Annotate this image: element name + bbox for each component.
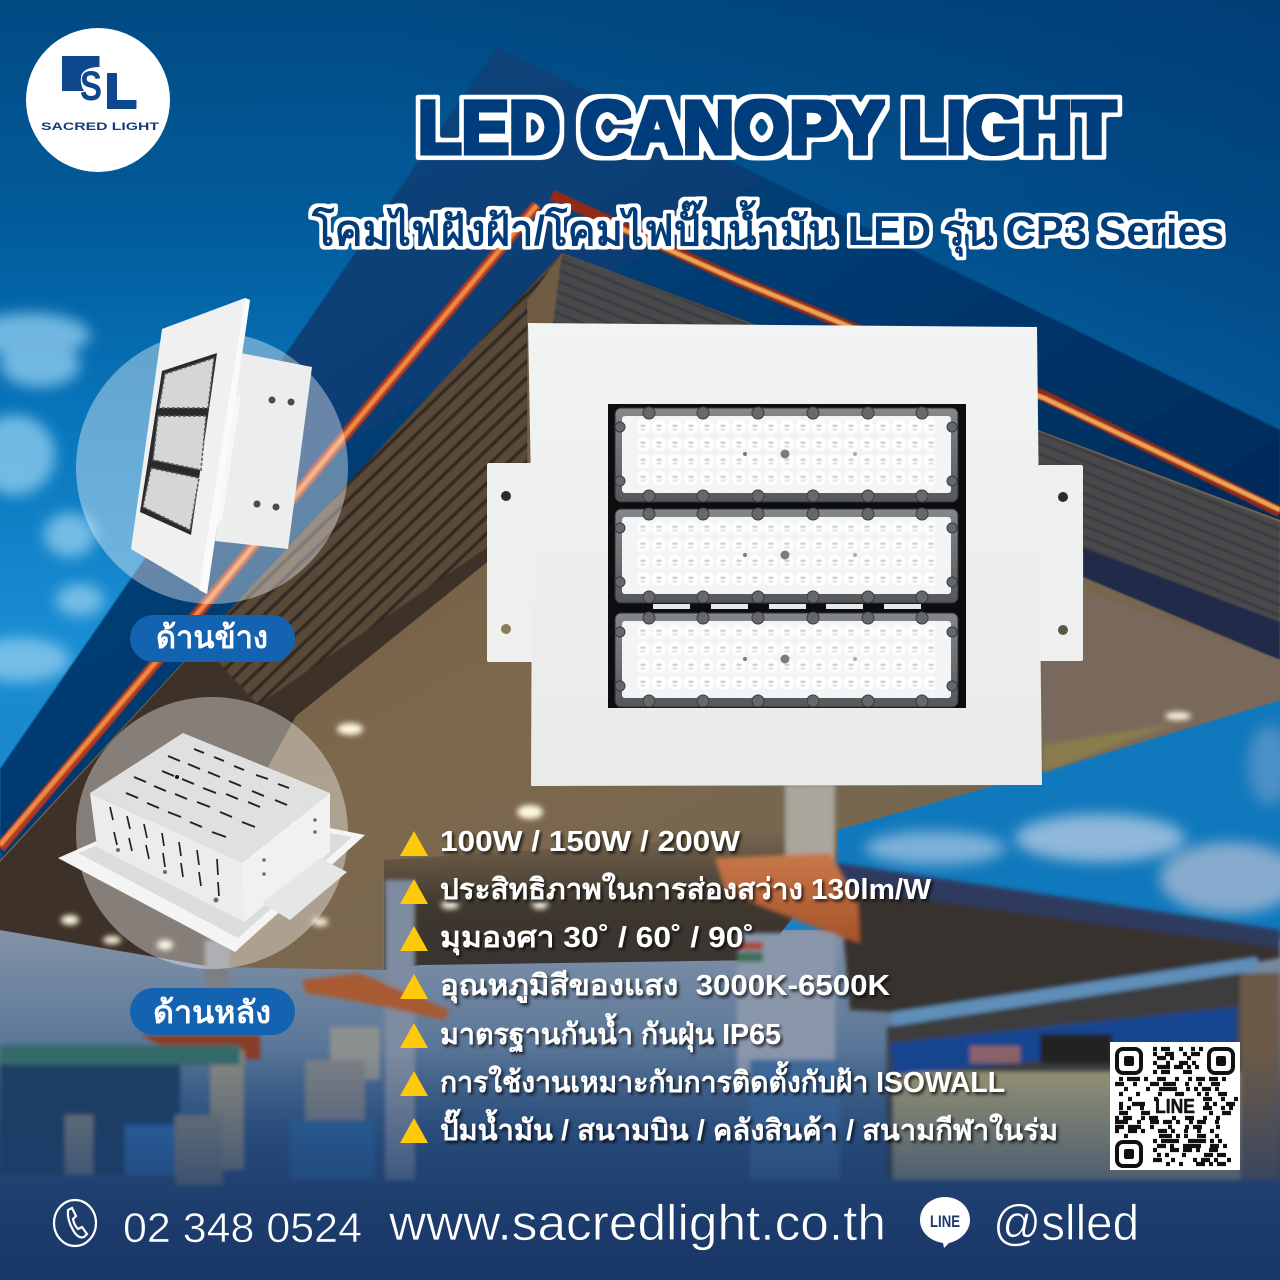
product: main front view xyxy=(487,323,1083,786)
vent slots top xyxy=(126,749,289,837)
ceiling lights xyxy=(61,712,1191,950)
feature: applications: ปั๊มน้ำมัน / สนามบิน / คลังสินค้า / สนามกีฬาในร่ม xyxy=(440,1108,1058,1147)
orange strips xyxy=(0,195,1280,848)
icon: LINE xyxy=(920,1197,970,1248)
right navy band xyxy=(1083,548,1280,660)
label: side view xyxy=(130,615,295,662)
feature: colour temperature: อุณหภูมิสีของแสง 3000K-6500K xyxy=(440,970,890,1003)
station structures xyxy=(0,785,1280,1185)
footer contact bar xyxy=(54,1195,1139,1251)
canopy underside xyxy=(0,253,1280,970)
left brown band xyxy=(0,253,562,967)
left mounting tab xyxy=(487,463,535,662)
LED modules xyxy=(615,407,958,707)
left bracket xyxy=(302,973,449,1020)
QR code: LINE xyxy=(1155,1096,1195,1118)
panel: side view circle xyxy=(76,298,348,604)
feature: installation: การใช้งานเหมาะกับการติดตั้งกับฝ้า ISOWALL xyxy=(440,1060,1005,1099)
icon: phone xyxy=(54,1200,96,1246)
clouds left xyxy=(0,313,104,682)
right mauve tan xyxy=(1043,577,1280,772)
central pillar xyxy=(785,785,835,875)
feature: waterproof: มาตรฐานกันน้ำ กันฝุ่น IP65 xyxy=(440,1012,781,1053)
label: back view: ด้านหลัง xyxy=(153,995,271,1030)
subtitle: โคมไฟฝังฝ้า/โคมไฟปั๊มน้ำมัน LED รุ่น CP3 Series xyxy=(311,199,1224,257)
label: side view: ด้านข้าง xyxy=(156,620,268,655)
left stripes xyxy=(200,253,562,705)
black opening xyxy=(608,404,966,708)
left pumps xyxy=(0,1045,240,1065)
gap slits xyxy=(653,604,921,609)
feature list xyxy=(400,826,1058,1147)
phone number: 02 348 0524 xyxy=(123,1204,362,1251)
website: www.sacredlight.co.th xyxy=(388,1195,886,1251)
back view product xyxy=(58,733,365,952)
feature: waterproof xyxy=(400,1012,781,1053)
feature: efficacy: ประสิทธิภาพในการส่องสว่าง 130lm/W xyxy=(440,872,932,906)
vent slots side xyxy=(110,807,219,896)
QR finder top-left xyxy=(1117,1049,1141,1073)
sky patch right xyxy=(830,695,1280,940)
right stripes xyxy=(527,253,1280,627)
second canopy xyxy=(837,863,1280,1012)
lower dusk sky xyxy=(0,930,1280,1280)
clouds right xyxy=(865,725,1280,914)
QR finder bottom-left xyxy=(1117,1142,1141,1166)
left pillar xyxy=(385,880,415,1180)
QR code xyxy=(1110,1042,1240,1170)
feature: beam angle: มุมองศา 30˚ / 60˚ / 90˚ xyxy=(440,922,754,955)
label: back view xyxy=(130,988,295,1035)
right mounting tab xyxy=(1038,465,1083,661)
side view product xyxy=(131,298,312,594)
logo: Sacred Light: SACRED LIGHT xyxy=(41,121,159,133)
logo: Sacred Light: S xyxy=(80,62,102,109)
roof navy xyxy=(0,47,1280,872)
panel: back view circle xyxy=(58,697,365,969)
central pump xyxy=(737,933,835,1083)
shop wall xyxy=(887,973,1280,1180)
lower dark fade xyxy=(0,1050,1280,1280)
central bracket xyxy=(715,853,860,943)
QR finder top-right xyxy=(1209,1049,1233,1073)
title: LED CANOPY LIGHT xyxy=(418,86,1116,169)
LINE id: @slled xyxy=(993,1195,1139,1251)
icon: LINE: LINE xyxy=(930,1212,960,1231)
feature: wattage: 100W / 150W / 200W xyxy=(440,826,741,858)
soffit shading xyxy=(384,830,837,970)
logo: Sacred Light xyxy=(26,28,170,172)
sky darkening to the right xyxy=(0,0,1280,600)
white frame xyxy=(528,323,1042,786)
